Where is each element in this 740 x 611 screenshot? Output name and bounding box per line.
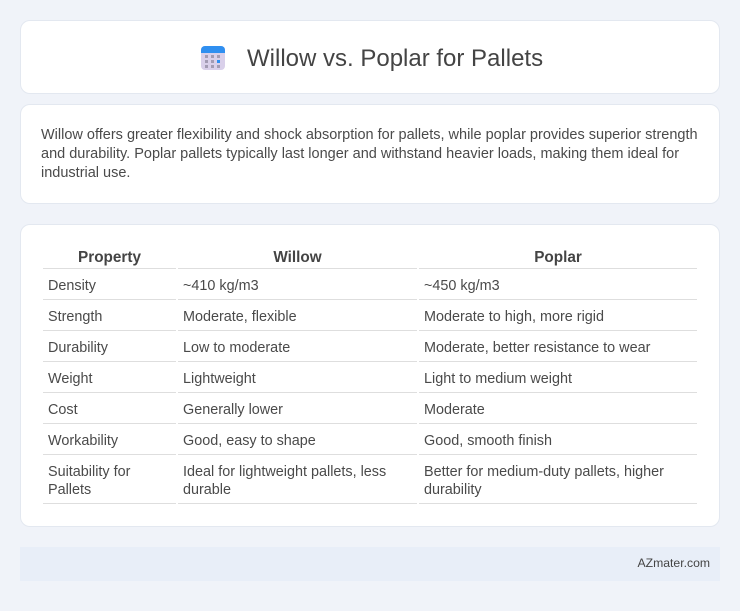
comparison table card: ~410 kg/m3 — [183, 278, 259, 294]
table header: Willow: Willow — [273, 249, 322, 266]
comparison table card — [20, 224, 720, 527]
header card — [20, 20, 720, 94]
comparison table card: Workability — [48, 433, 118, 449]
row: density — [48, 278, 500, 294]
comparison table card: Moderate to high, more rigid — [424, 309, 604, 325]
comparison table card: Moderate, better resistance to wear — [424, 340, 650, 356]
comparison table card: Generally lower — [183, 402, 283, 418]
comparison table card: Cost — [48, 402, 78, 418]
row: weight — [48, 371, 572, 387]
footer bar — [20, 547, 720, 581]
summary paragraph: Willow offers greater flexibility and shock absorption for pallets, while poplar provides superior strength — [41, 127, 698, 143]
comparison table card: Moderate, flexible — [183, 309, 297, 325]
comparison table card: Light to medium weight — [424, 371, 572, 387]
summary paragraph: industrial use. — [41, 165, 130, 181]
row: suitability for pallets: Pallets — [48, 482, 91, 498]
row: suitability for pallets: Ideal for lightweight pallets, less — [183, 464, 386, 480]
table header: Property: Property — [78, 249, 141, 266]
comparison table card: Low to moderate — [183, 340, 290, 356]
title: Willow vs. Poplar for Pallets — [247, 45, 543, 72]
summary paragraph: and durability. Poplar pallets typically last longer and withstand heavier loads, making them ideal for — [41, 146, 679, 162]
comparison table card: Moderate — [424, 402, 485, 418]
comparison table card: Density — [48, 278, 96, 294]
row: suitability for pallets: Suitability for — [48, 464, 130, 480]
icon: calendar — [201, 46, 225, 70]
row: suitability for pallets: Better for medium-duty pallets, higher — [424, 464, 664, 480]
summary text card — [20, 104, 720, 204]
row: strength — [48, 309, 604, 325]
comparison table card: Durability — [48, 340, 108, 356]
comparison table card: Good, smooth finish — [424, 433, 552, 449]
footer source text: AZmater.com — [638, 556, 710, 570]
comparison table card: ~450 kg/m3 — [424, 278, 500, 294]
row: cost — [48, 402, 485, 418]
comparison table card: Weight — [48, 371, 93, 387]
row: suitability for pallets: durability — [424, 482, 482, 498]
row: workability — [48, 433, 552, 449]
comparison table card: Strength — [48, 309, 102, 325]
comparison table card: Good, easy to shape — [183, 433, 316, 449]
row: suitability for pallets: durable — [183, 482, 231, 498]
row: durability — [48, 340, 650, 356]
summary paragraph — [41, 127, 698, 181]
row: suitability for pallets — [48, 464, 664, 498]
table header: Poplar: Poplar — [534, 249, 582, 266]
comparison table card: Lightweight — [183, 371, 256, 387]
